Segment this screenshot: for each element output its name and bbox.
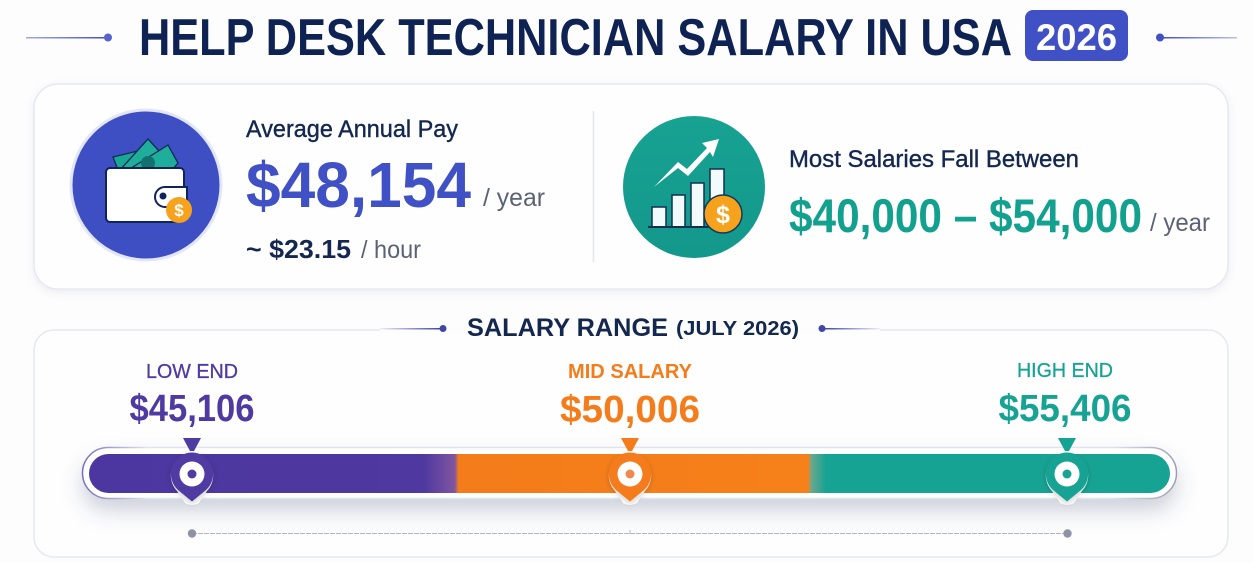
text: per year: / year bbox=[483, 184, 545, 212]
heading: salary range: (JULY 2026) bbox=[676, 318, 799, 340]
number: typical salary range: $40,000 – $54,000 bbox=[789, 189, 1142, 242]
text: hourly pay: ~ $23.15 bbox=[246, 234, 351, 264]
label: mid salary: MID SALARY bbox=[568, 361, 693, 383]
text: hourly pay: / hour bbox=[361, 236, 421, 264]
icon: rising bar chart with coin bbox=[623, 116, 765, 258]
marker: mid salary bbox=[609, 438, 651, 505]
panel: salary range bbox=[34, 314, 1228, 557]
panel: pay summary bbox=[34, 84, 1228, 289]
label: low end: $45,106 bbox=[130, 388, 254, 430]
label: high end: $55,406 bbox=[998, 388, 1132, 430]
year badge bbox=[1025, 10, 1128, 61]
label: high end: HIGH END bbox=[1017, 360, 1113, 382]
marker: high end bbox=[1046, 438, 1088, 505]
title right accent bbox=[1156, 34, 1237, 42]
text: hourly pay bbox=[246, 234, 421, 264]
marker: low end bbox=[171, 438, 213, 505]
label: high end bbox=[998, 360, 1132, 430]
label: low end bbox=[130, 361, 254, 430]
icon: wallet with cash bbox=[71, 110, 221, 260]
year badge: 2026 bbox=[1036, 17, 1117, 58]
icon: rising bar chart with coin: $ bbox=[716, 201, 730, 229]
salary range bar bbox=[82, 448, 1176, 498]
title: HELP DESK TECHNICIAN SALARY IN USA bbox=[139, 9, 1012, 67]
label: mid salary: $50,006 bbox=[560, 389, 700, 431]
text: most salaries fall between: Most Salaries Fall Between bbox=[789, 146, 1079, 173]
text: range per year: / year bbox=[1150, 209, 1210, 237]
heading: salary range bbox=[380, 314, 880, 342]
label: low end: LOW END bbox=[146, 361, 238, 383]
number: average annual salary: $48,154 bbox=[246, 149, 471, 221]
icon: wallet with cash: $ bbox=[174, 201, 184, 220]
heading: salary range: SALARY RANGE bbox=[467, 314, 668, 342]
text: average annual pay: Average Annual Pay bbox=[246, 116, 458, 143]
range scale line bbox=[188, 529, 1072, 538]
label: mid salary bbox=[560, 361, 700, 431]
